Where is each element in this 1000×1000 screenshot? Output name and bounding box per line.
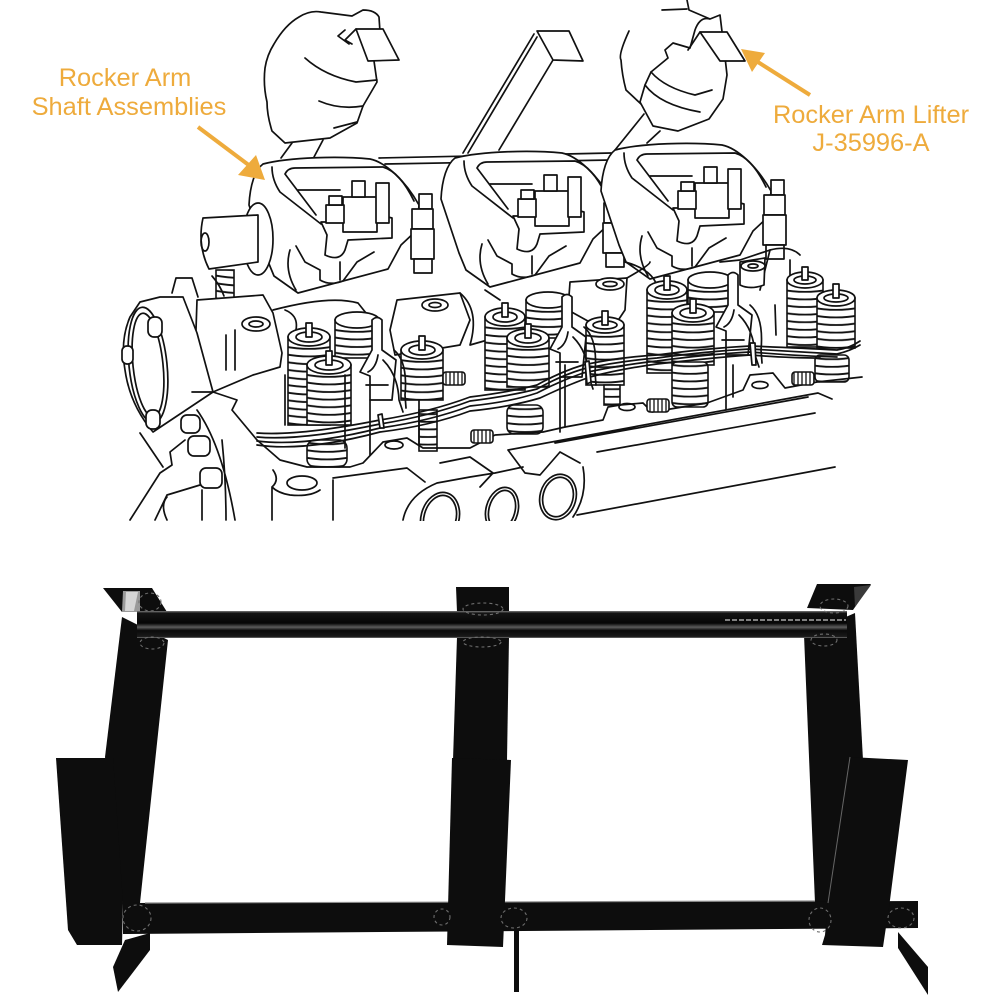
label: Rocker Arm Shaft Assemblies: Rocker Arm [59, 64, 191, 92]
wiring harness [257, 341, 860, 447]
cylinder head top blocks [172, 248, 800, 392]
intake manifold lines and ports [120, 393, 880, 551]
rod highlight [725, 619, 846, 621]
label: Rocker Arm Shaft Assemblies [32, 64, 226, 121]
bottom bar [123, 901, 918, 934]
label: Rocker Arm Lifter [773, 101, 970, 157]
center plate [447, 758, 511, 947]
gear cover with bolts [122, 297, 235, 520]
left plate [56, 758, 123, 945]
center foot [514, 930, 519, 992]
label: Rocker Arm Lifter: J-35996-A [812, 129, 930, 157]
shaft end cap and bolt [201, 203, 273, 304]
fuel injectors [360, 272, 762, 455]
valve springs, back row [288, 267, 823, 425]
rocker arm shaft assembly 1 [249, 157, 434, 293]
icon: center lifter handle [463, 31, 583, 153]
spring lower sections below wiring [307, 355, 849, 467]
right arm [804, 613, 863, 903]
rocker arm shaft assembly 2 [441, 151, 626, 287]
right plate [822, 757, 908, 947]
icon: right hand holding lifter [615, 0, 745, 150]
right top flange [807, 584, 871, 610]
label: Rocker Arm Shaft Assemblies: Shaft Assemblies [32, 93, 226, 121]
left foot [113, 933, 150, 992]
icon: left hand holding lifter [264, 10, 399, 158]
rocker arm shaft assembly 3 [601, 143, 786, 279]
head bolts and block edge [192, 365, 862, 467]
left top flange [103, 588, 167, 612]
arrow: to rocker arm lifter [741, 49, 810, 95]
label: Rocker Arm Lifter: Rocker Arm Lifter [773, 101, 970, 129]
arrow: to rocker arm shaft assemblies [198, 127, 265, 180]
top rod [137, 611, 847, 638]
left arm [105, 617, 168, 905]
center arm [453, 637, 509, 760]
right foot [898, 932, 928, 995]
center top flange [456, 587, 509, 612]
rocker arm shaft rail [379, 153, 611, 164]
panel: engine line drawing [120, 0, 880, 551]
panel: rocker arm lifter tool photo [56, 584, 928, 995]
valve springs, front row [307, 284, 855, 425]
welds [123, 593, 914, 932]
